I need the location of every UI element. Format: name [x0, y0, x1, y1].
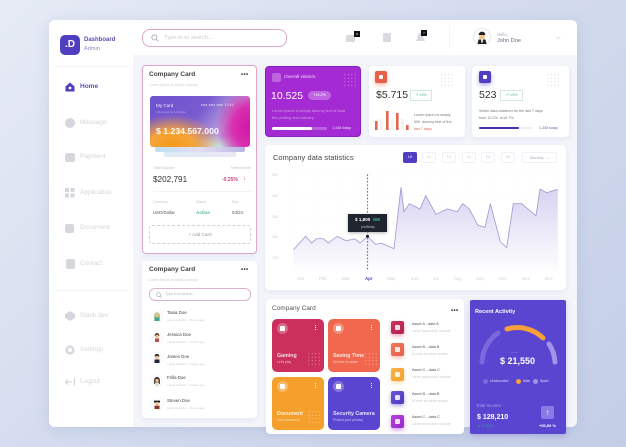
card details: Status	[196, 200, 206, 204]
change pill: +15.2%	[313, 93, 326, 97]
x axis labels	[297, 276, 553, 281]
x axis labels: Nov	[522, 276, 530, 281]
x axis labels: May	[387, 276, 395, 281]
contact: Frilla Doe: Frilla Doe	[167, 375, 186, 380]
y axis labels: 30K	[272, 235, 278, 239]
contact: James Doe	[154, 354, 205, 366]
icon: visitors	[272, 73, 281, 82]
nav item: application	[65, 188, 112, 198]
panel: contact list	[142, 261, 257, 418]
description: last 7 days	[414, 127, 432, 131]
asset: B: Asset B - data B	[412, 345, 439, 349]
x axis labels: Dec	[545, 276, 553, 281]
pattern	[343, 73, 357, 87]
description: Lorem Ipsum is simply	[414, 113, 451, 117]
card details	[153, 191, 251, 215]
description	[479, 109, 543, 120]
nav item: settings: Settings	[80, 346, 104, 353]
credit card: Advanced for Lifestyle	[156, 110, 186, 114]
change badge: ↗ 13%	[506, 93, 517, 97]
icon: visitor data	[479, 71, 491, 83]
asset: B second	[388, 390, 448, 409]
icon: upload arrow	[541, 406, 554, 419]
credit card	[150, 96, 250, 147]
tile: gaming: Gaming	[277, 353, 297, 359]
panel: company card tiles	[266, 299, 464, 434]
contact: Jessica Doe: Latest transfer - 3 hours ago	[167, 340, 205, 344]
sidebar navigation	[65, 82, 112, 386]
add card button	[149, 225, 251, 244]
asset: C second: Lorem ipsum dolor sit amet	[412, 422, 450, 426]
tab active	[403, 152, 417, 163]
panel: company card	[142, 65, 257, 254]
logo: .D	[65, 39, 75, 50]
asset: A: Asset A - data A	[412, 322, 439, 326]
badge: bell: 7	[423, 31, 425, 35]
stat: total balance: $202,791	[153, 175, 187, 184]
pattern	[546, 73, 560, 87]
asset: A	[388, 320, 450, 338]
asset: B second: Ut enim ad minim veniam	[412, 399, 448, 403]
nav item: application: Application	[80, 189, 112, 196]
asset: A: Lorem ipsum dolor sit amet	[412, 329, 450, 333]
subtitle: Lorem Ipsum is simply dummy	[149, 278, 198, 282]
change badge: ↗ 13%	[415, 93, 427, 97]
growth value: +00,90 %	[539, 423, 556, 428]
total income: ▲ 1.05 %	[477, 424, 493, 428]
change badge	[410, 90, 432, 101]
tile: security camera: Protect your privacy	[333, 418, 363, 422]
description: from 10.2% to15.7%.	[479, 116, 514, 120]
change pill	[308, 91, 331, 100]
card details: Exp	[232, 200, 238, 204]
badge: mail: 8	[356, 32, 358, 36]
total income: $ 128,210	[477, 414, 508, 421]
gauge caption: -------	[511, 350, 518, 354]
tab 5: 1W	[485, 155, 491, 159]
y axis labels: 20K	[272, 256, 278, 260]
today label: 1,345 today	[539, 126, 558, 130]
x axis labels: Oct	[499, 276, 506, 281]
stat: total balance	[153, 166, 187, 184]
contact: Frilla Doe	[154, 375, 205, 387]
panel: recent activity	[470, 300, 566, 434]
menu dots: •••	[241, 72, 249, 78]
search bar	[142, 29, 287, 47]
tab 6	[501, 152, 515, 163]
icon: upload arrow: ↑	[546, 408, 550, 417]
asset: B: Ut enim ad minim veniam	[412, 352, 448, 356]
y axis labels	[272, 173, 278, 260]
header icons	[346, 30, 427, 42]
gauge value: $ 21,550	[500, 356, 535, 366]
legend	[483, 379, 548, 384]
contact: Jessica Doe: Jessica Doe	[167, 332, 191, 337]
badge: mail	[354, 31, 360, 37]
tab 3: 1H	[447, 155, 451, 159]
icon: mail	[346, 35, 355, 42]
nav item: stack dev: Stack dev	[80, 312, 109, 319]
y axis labels: 50K	[272, 173, 278, 177]
asset icon C	[391, 368, 404, 381]
search bar: Type in to search...	[164, 34, 213, 40]
total income	[476, 403, 508, 428]
user profile: Hello,	[497, 32, 508, 36]
header bar	[133, 20, 577, 55]
asset: C second: Asset C - data C	[412, 415, 440, 419]
change badge	[500, 90, 523, 101]
chart tooltip	[348, 214, 387, 232]
nav item: settings	[66, 346, 104, 355]
heading: Company Card	[149, 71, 195, 78]
legend: Sale	[523, 379, 530, 383]
description: 500 dummy text of the	[414, 120, 452, 124]
asset: C: Asset C - data C	[412, 368, 440, 372]
contact: Jessica Doe	[154, 332, 205, 344]
tile: security camera: Security Camera	[333, 411, 375, 417]
tile: document: Your document	[277, 418, 300, 422]
card details: 04/24	[232, 210, 243, 214]
icon: bell	[416, 33, 425, 41]
asset: C: Lorem ipsum dolor sit amet	[412, 375, 450, 379]
value: 10.525	[271, 90, 303, 102]
icon: revenue	[375, 71, 387, 83]
dashboard window	[49, 20, 577, 427]
x axis labels: Aug	[454, 276, 462, 281]
legend: Unallocated	[490, 379, 508, 383]
value: 523	[479, 89, 497, 101]
contact: Steven Doe	[154, 398, 205, 410]
y axis labels: 35K	[272, 215, 278, 219]
nav item: logout	[65, 378, 100, 386]
credit card: My Card	[156, 103, 173, 108]
nav item: message	[65, 118, 106, 128]
pattern	[440, 73, 454, 87]
x axis labels: Jun	[411, 276, 418, 281]
panel: company data statistics	[265, 145, 566, 290]
icon: contact	[383, 33, 391, 42]
brand name: Dashboard	[84, 37, 115, 43]
x axis labels: Jan	[297, 276, 304, 281]
tab 3	[442, 152, 456, 163]
contact: Tania Doe: Latest transfer - 3 hours ago	[167, 318, 205, 322]
gauge chart	[480, 325, 558, 364]
tab 2: 1H	[427, 155, 431, 159]
search field	[149, 288, 251, 301]
asset: C second	[388, 414, 450, 433]
sidebar	[49, 20, 133, 427]
contact: Steven Doe: Steven Doe	[167, 398, 190, 403]
tab active: 1H	[408, 155, 412, 159]
card details: USD/Dollar	[153, 210, 175, 214]
tab 4: 1D	[467, 155, 471, 159]
description: the printing and industry.	[272, 114, 314, 120]
badge: bell	[421, 30, 427, 36]
description: Visitor data obtained for the last 7 days	[479, 109, 543, 113]
logo	[60, 35, 80, 55]
credit card: $ 1.234.567.000	[156, 126, 219, 136]
stat: traffic per month	[222, 166, 251, 183]
nav item: stack dev	[65, 311, 109, 321]
nav item: home: Home	[80, 83, 98, 90]
search field: Type in to search...	[165, 292, 195, 296]
card details: Active	[196, 210, 210, 214]
contact: Frilla Doe: Latest transfer - 3 hours ago	[167, 383, 205, 387]
subtitle: Lorem Ipsum is simply dummy	[149, 83, 198, 87]
asset icon B	[391, 343, 404, 356]
asset icon B second	[391, 391, 404, 404]
credit card: •••• •••• •••• 1234	[201, 102, 234, 107]
menu dots: •••	[241, 267, 249, 273]
tile: security camera	[328, 377, 380, 430]
brand name	[84, 36, 115, 52]
bar chart	[375, 111, 409, 130]
contact: Tania Doe	[154, 310, 205, 322]
credit card reflection lower	[164, 152, 236, 157]
total income: Total Income	[476, 403, 501, 408]
panel: revenue	[369, 66, 465, 137]
heading: Company Card	[272, 305, 316, 312]
title: Overall visitors	[284, 75, 315, 80]
nav item: contact: Contact	[80, 260, 102, 267]
stat: traffic per month: ↓	[243, 176, 246, 182]
nav item: logout: Logout	[80, 378, 100, 385]
heading: Company Card	[149, 266, 195, 273]
panel: overall visitors	[265, 66, 361, 137]
stat: traffic per month: Traffic/Month	[230, 166, 251, 170]
asset icon A	[391, 321, 404, 334]
chart heading: Company data statistics	[273, 153, 354, 162]
tab 4	[462, 152, 476, 163]
asset: B second: Asset B - data B	[412, 392, 439, 396]
stat: total balance: Total Balance	[153, 166, 175, 170]
progress bar	[479, 127, 533, 129]
tab 6: 1M	[506, 155, 510, 159]
tile: gaming: Let's play	[277, 360, 291, 364]
asset icon C second	[391, 415, 404, 428]
chart tooltip: profit/day	[361, 225, 375, 229]
brand name: Admin	[84, 46, 100, 52]
stat: traffic per month: -0.25%	[222, 177, 238, 183]
heading: Recent Activity	[475, 309, 515, 315]
nav item: contact	[66, 259, 102, 269]
user profile: John Doe	[497, 38, 521, 44]
contact: James Doe: Latest transfer - 3 hours ago	[167, 362, 205, 366]
dropdown: Monthly ⌄	[530, 155, 549, 160]
nav item: document: Document	[80, 224, 110, 231]
tile: saving time	[328, 319, 380, 372]
x axis labels: Sep	[476, 276, 484, 281]
nav item: payment: Payment	[80, 153, 106, 160]
range tabs	[403, 152, 557, 163]
asset: B	[388, 342, 448, 360]
panel: visitor data	[472, 66, 569, 137]
tile: saving time: Saving Time	[333, 353, 364, 359]
x axis labels: Mar	[342, 276, 350, 281]
contact: James Doe: James Doe	[167, 354, 189, 359]
legend: Sport	[540, 379, 548, 383]
asset: C	[388, 367, 450, 386]
progress bar	[272, 127, 327, 130]
chart tooltip: $ 1,800	[355, 217, 370, 222]
nav item: payment	[65, 153, 106, 162]
tab 5	[481, 152, 495, 163]
nav item: message: Message	[80, 119, 106, 126]
contact: Steven Doe: Latest transfer - 3 hours ago	[167, 406, 205, 410]
x axis labels: Apr	[365, 276, 373, 281]
tab 2	[422, 152, 436, 163]
credit card reflection	[155, 147, 245, 152]
today label: 1,345 today	[332, 126, 351, 130]
tile: document: Document	[277, 411, 303, 417]
nav item: home	[66, 82, 98, 92]
dropdown	[522, 152, 557, 163]
user profile	[473, 28, 561, 46]
card details: Currency	[153, 200, 168, 204]
description	[414, 113, 452, 131]
description: Lorem Ipsum is simply dummy text of data	[272, 108, 345, 113]
tile: gaming	[272, 319, 324, 372]
nav item: document	[65, 224, 110, 233]
avatar: John Doe	[473, 28, 491, 46]
y axis labels: 40K	[272, 194, 278, 198]
line chart	[293, 174, 558, 270]
description	[272, 108, 345, 120]
x axis labels: Jul	[433, 276, 439, 281]
tile: document	[272, 377, 324, 430]
add card button: + Add Card	[188, 232, 212, 237]
tile: saving time: No time to waste	[333, 360, 358, 364]
contact: Tania Doe: Tania Doe	[167, 310, 187, 315]
menu dots: •••	[451, 308, 459, 314]
value: $5.715	[376, 89, 408, 101]
x axis labels: Feb	[319, 276, 327, 281]
